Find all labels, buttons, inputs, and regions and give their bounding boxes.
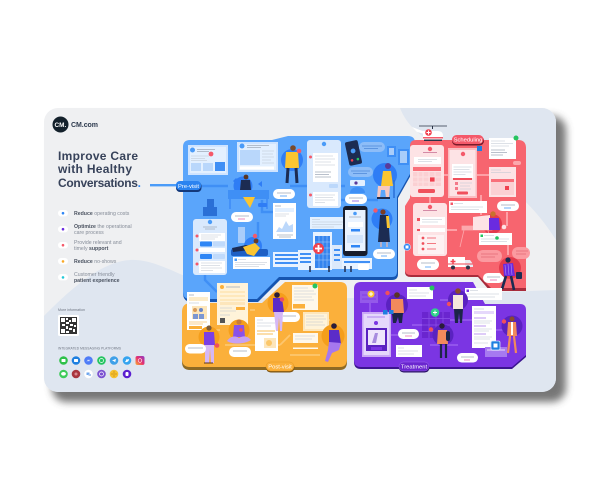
note: doctor message — [465, 288, 502, 300]
logo: CM. — [54, 122, 66, 129]
whatsapp note: scheduling — [479, 233, 512, 245]
benefits list: patient experience — [74, 278, 120, 284]
benefits list: care process — [74, 230, 104, 236]
chat pills: treatment — [398, 329, 478, 362]
background card — [44, 108, 556, 392]
appointment card 2 — [237, 142, 278, 172]
person: woman in coral — [502, 316, 522, 353]
person: seated in lilac — [322, 323, 344, 362]
route lines — [201, 186, 378, 292]
benefits list: Optimize the operational — [74, 224, 132, 230]
panel: scheduling — [405, 126, 530, 291]
form card — [217, 283, 248, 325]
post-visit label: Post-visit — [268, 365, 292, 371]
logo: CM.com — [71, 122, 98, 129]
title: with Healthy — [57, 162, 132, 176]
calendar card A — [410, 145, 444, 197]
person: woman with purple coat — [268, 292, 288, 331]
pre-visit label: Pre-visit — [178, 184, 199, 190]
panel: post-visit — [182, 282, 347, 372]
icon: blue badge between panels — [404, 244, 410, 250]
whatsapp note — [489, 136, 518, 159]
scheduling label: Scheduling — [454, 138, 482, 144]
more information label: More information — [58, 308, 85, 312]
panel: pre-visit — [176, 136, 416, 302]
ambulance — [448, 257, 473, 270]
benefits list: Customer friendly — [74, 272, 115, 278]
note: whatsapp post-visit — [292, 284, 318, 310]
note: cream — [303, 312, 329, 331]
video call blob — [350, 180, 365, 193]
chat pill: scheduling — [497, 201, 519, 211]
note: treatment plan — [472, 306, 496, 348]
info card with graph — [273, 203, 296, 239]
person: woman with phone — [372, 208, 392, 247]
appointment card 1 — [188, 145, 228, 175]
connector: title to pre-visit — [150, 184, 178, 186]
white note: intro — [187, 292, 210, 330]
note: button — [293, 333, 318, 349]
person: standing in yellow coat — [281, 145, 303, 183]
title: Improve Care — [58, 149, 138, 163]
person: man in orange shirt — [385, 291, 408, 323]
pre-visit label — [176, 181, 202, 192]
note: reminder — [396, 345, 422, 357]
desk lamp icons — [233, 178, 262, 187]
chat pills: post-visit — [185, 312, 300, 357]
post-visit label — [266, 362, 294, 372]
benefits list: Reduce no-shows — [74, 259, 117, 265]
small pill — [513, 161, 521, 165]
person: at desk — [228, 175, 269, 209]
person: man in purple — [198, 325, 220, 363]
waiting room chair — [203, 199, 217, 216]
person: woman with sling — [447, 288, 468, 323]
person: seated cross-legged — [227, 319, 251, 344]
benefits list: timely support — [74, 246, 109, 252]
receptionist at desk — [460, 211, 506, 247]
clipboard icons — [387, 146, 409, 165]
notification note: hospital — [310, 217, 348, 229]
window grid — [422, 308, 450, 338]
platforms label: INTEGRATED MESSAGING PLATFORMS — [58, 346, 121, 350]
person: seated on phone — [373, 163, 397, 199]
chat pill: appointment — [417, 259, 439, 270]
phone mock-up — [343, 206, 368, 256]
person: man with backpack — [429, 323, 454, 358]
building with yellow cross — [360, 290, 378, 303]
calendar note — [489, 167, 516, 197]
speech bubbles — [348, 142, 385, 177]
treatment label — [399, 362, 430, 372]
note: whatsapp treatment — [407, 286, 434, 299]
card C — [413, 203, 447, 256]
chat pill: desk — [231, 212, 253, 222]
schedule card B — [448, 146, 482, 198]
treatment label: Treatment — [401, 365, 427, 371]
panel: treatment — [354, 282, 526, 372]
chat card — [307, 140, 341, 208]
benefits list: Reduce operating costs — [74, 211, 130, 217]
person: striped shirt walking — [499, 257, 522, 290]
helicopter — [412, 126, 447, 141]
chat pill: patient — [483, 273, 504, 283]
patient on sofa — [231, 227, 268, 256]
scheduling label — [452, 135, 484, 146]
card: appointment confirmed — [362, 310, 391, 357]
check-in machine — [485, 341, 507, 357]
icon: incoming call phone — [345, 140, 362, 166]
appointment flow card — [193, 219, 227, 275]
chat pill: top — [273, 189, 295, 199]
title — [57, 149, 141, 190]
note: tips — [255, 317, 278, 351]
speech bubbles: scheduling — [477, 247, 530, 262]
QR code — [58, 315, 79, 336]
hospital — [273, 232, 372, 272]
chat pill: right — [373, 249, 395, 259]
logo — [52, 116, 98, 132]
notification note — [233, 257, 270, 269]
card shadow — [52, 116, 566, 402]
note: scheduling message — [449, 201, 487, 213]
chat pill: video — [345, 194, 367, 204]
messaging platform icons — [59, 356, 145, 378]
benefits list: Provide relevant and — [74, 240, 122, 246]
title: Conversations. — [58, 176, 141, 190]
benefits list — [58, 210, 132, 284]
